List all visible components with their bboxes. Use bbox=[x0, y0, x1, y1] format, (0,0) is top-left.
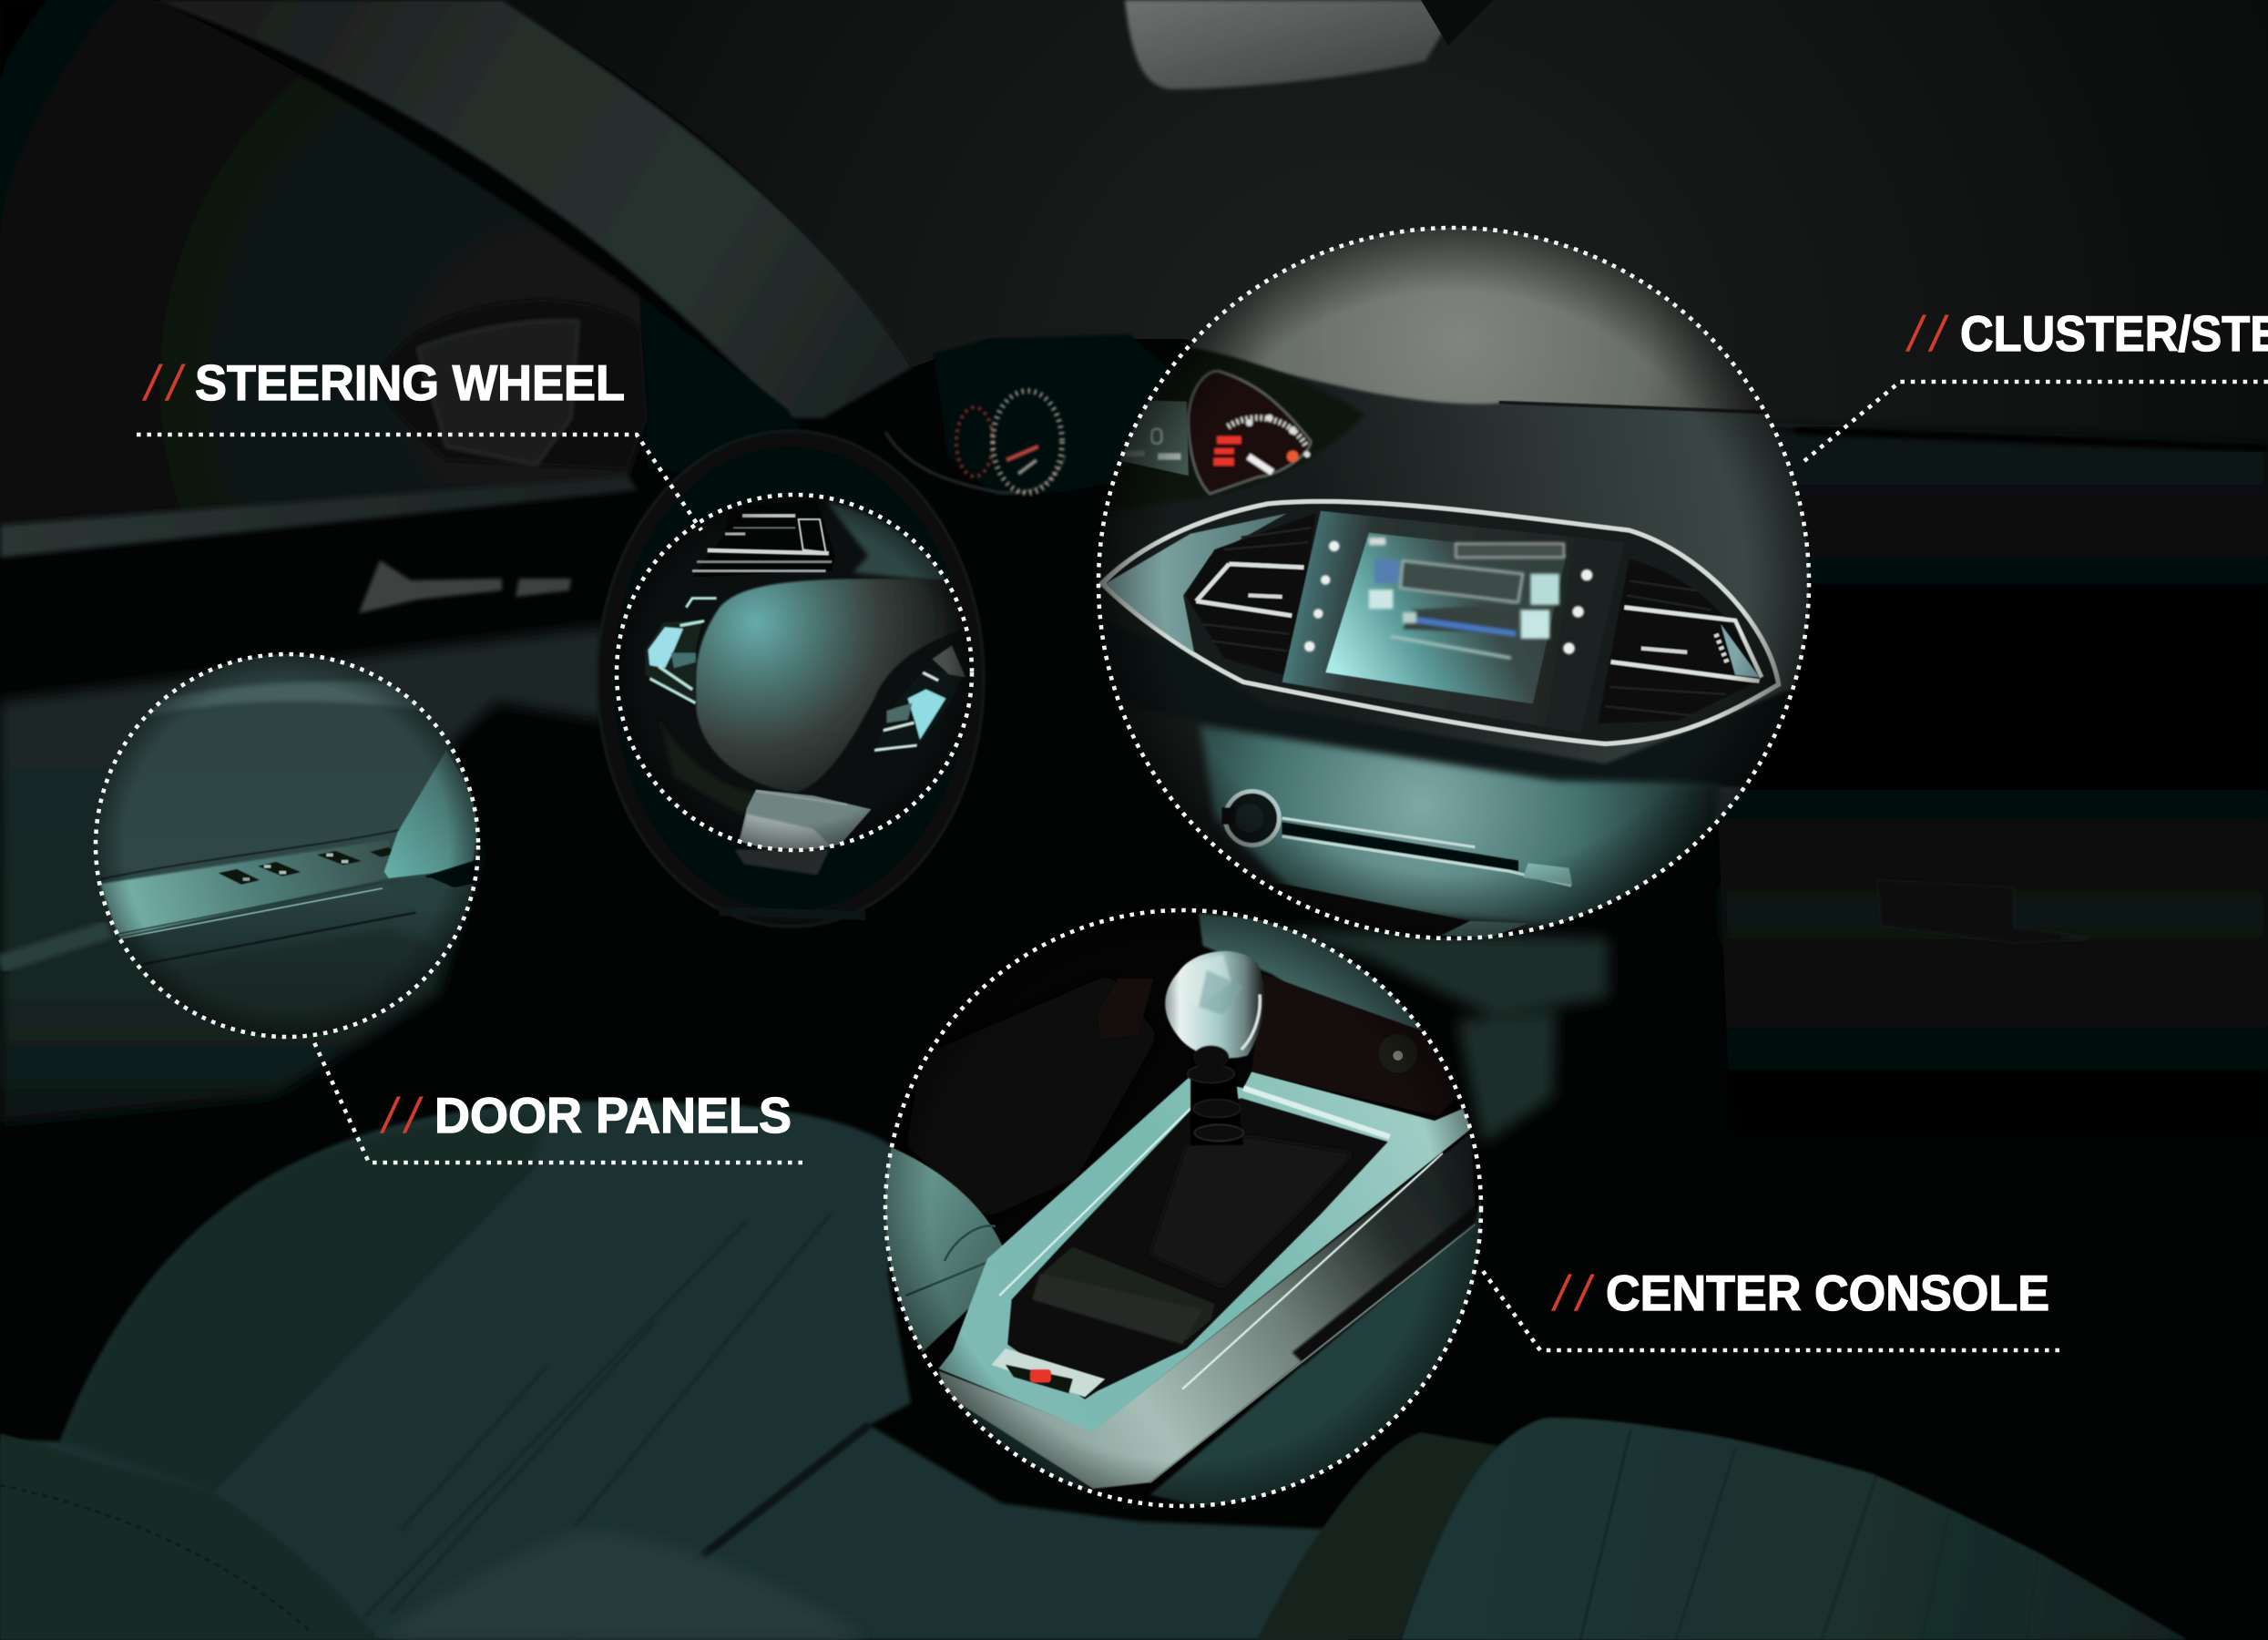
door panel surface bbox=[96, 654, 478, 969]
lower centre stack bbox=[1200, 725, 1721, 928]
gauges bbox=[885, 391, 1066, 493]
pillar base bbox=[641, 297, 802, 474]
lens trim highlight bbox=[1104, 501, 1779, 743]
tunnel top bbox=[1199, 913, 1503, 1104]
glovebox handle bbox=[1878, 881, 2090, 942]
gear boot bbox=[1149, 1137, 1354, 1287]
rear-view mirror bbox=[1125, 0, 1462, 89]
trim lines bbox=[118, 882, 416, 964]
door sill bbox=[0, 476, 638, 558]
center console leader line bbox=[1483, 1271, 2059, 1350]
tunnel slit bbox=[703, 1425, 869, 1555]
footwell bbox=[865, 893, 1503, 1531]
label: steering wheel bbox=[137, 354, 701, 530]
centre panel bbox=[1282, 511, 1624, 733]
headrest front bbox=[0, 1433, 378, 1640]
screen widgets bbox=[1369, 538, 1564, 658]
right lower bbox=[1149, 1121, 1503, 1531]
left seat bbox=[882, 1143, 1004, 1352]
touch screen bbox=[1325, 533, 1567, 704]
shifter well bbox=[1007, 1098, 1388, 1399]
body shadow bbox=[1292, 1206, 1476, 1365]
center console label text: CENTER CONSOLE bbox=[1606, 1265, 2049, 1321]
wheel backdrop bbox=[625, 506, 963, 833]
binnacle bbox=[934, 334, 1184, 497]
dotted ring: console bbox=[885, 910, 1481, 1506]
instrument display bbox=[1119, 400, 1189, 476]
door panels slashes: // bbox=[379, 1087, 424, 1143]
right vent bbox=[1598, 559, 1762, 723]
label: door panels bbox=[313, 1040, 802, 1163]
centre stack sides bbox=[1266, 929, 1608, 1143]
dashboard base bbox=[1075, 210, 1831, 966]
volume knob bbox=[1221, 791, 1279, 846]
shift rod bbox=[1188, 1056, 1243, 1145]
headrest stitch bbox=[0, 1485, 310, 1631]
door crease bbox=[0, 929, 109, 964]
console side body bbox=[938, 1133, 1476, 1489]
screen buttons bbox=[1304, 541, 1592, 654]
gauge bbox=[1188, 371, 1311, 494]
dotted ring: steering wheel bbox=[617, 495, 972, 850]
window switches bbox=[219, 847, 396, 885]
circle: steering wheel bbox=[625, 499, 966, 850]
tunnel panel bbox=[565, 1425, 1366, 1640]
door panels label text: DOOR PANELS bbox=[434, 1087, 792, 1143]
lower switches bbox=[1234, 880, 1518, 966]
passenger seat side bbox=[1257, 1432, 1498, 1640]
cup holder lip bbox=[1040, 1246, 1215, 1340]
steering wheel rim bbox=[598, 431, 984, 927]
mirror mount bbox=[1421, 0, 1494, 46]
circle: center console bbox=[865, 893, 1503, 1531]
instrument hood bbox=[1104, 347, 1364, 511]
door handle bbox=[359, 560, 571, 613]
seat bolster bbox=[61, 1113, 547, 1491]
airbag hub bbox=[695, 579, 965, 793]
ceiling bbox=[502, 0, 2268, 446]
upper dashboard bbox=[1075, 210, 1831, 417]
label: cluster bbox=[1800, 305, 2268, 465]
left button cluster bbox=[645, 599, 717, 705]
right button cluster bbox=[874, 645, 965, 753]
cluster slashes: // bbox=[1905, 305, 1949, 362]
dashboard right bbox=[1703, 428, 2268, 1139]
window sill bbox=[100, 840, 392, 937]
side window bbox=[0, 0, 648, 525]
left vent bbox=[1186, 513, 1316, 677]
side mirror bbox=[376, 300, 648, 469]
circle: door panels bbox=[96, 654, 478, 1037]
teal wedge bbox=[1106, 513, 1287, 658]
door panel bbox=[0, 627, 606, 1122]
parking brake button bbox=[1030, 1369, 1051, 1382]
center console slashes: // bbox=[1550, 1265, 1595, 1321]
circle: cluster and stereo bbox=[1075, 210, 1831, 966]
CD slot bbox=[1282, 818, 1572, 886]
console trim bbox=[938, 1071, 1471, 1431]
driver seat base bbox=[0, 1102, 911, 1640]
cluster leader line bbox=[1800, 382, 2268, 465]
teal door pull bbox=[384, 750, 480, 878]
steering wheel leader line bbox=[137, 435, 701, 530]
seat creases bbox=[210, 1162, 831, 1617]
label: center console bbox=[1483, 1265, 2059, 1350]
dotted ring: cluster bbox=[1098, 228, 1809, 938]
passenger seat bbox=[1401, 1418, 2188, 1640]
dotted ring: door bbox=[96, 654, 478, 1037]
steering wheel slashes: // bbox=[141, 354, 186, 411]
dash shut line bbox=[1794, 430, 2268, 448]
dark recess bbox=[1251, 974, 1476, 1117]
lower spoke bbox=[738, 790, 872, 847]
door panels leader line bbox=[313, 1040, 802, 1163]
steering wheel label text: STEERING WHEEL bbox=[195, 354, 625, 411]
lens trim bbox=[1101, 501, 1779, 743]
button plate bbox=[991, 1348, 1105, 1398]
gear knob bbox=[1165, 951, 1264, 1070]
a-pillar bbox=[153, 0, 913, 418]
dark band below trim bbox=[1075, 615, 1831, 788]
shut line bbox=[1499, 403, 1831, 419]
armrest bbox=[378, 1531, 865, 1640]
air vent behind wheel bbox=[692, 508, 834, 577]
